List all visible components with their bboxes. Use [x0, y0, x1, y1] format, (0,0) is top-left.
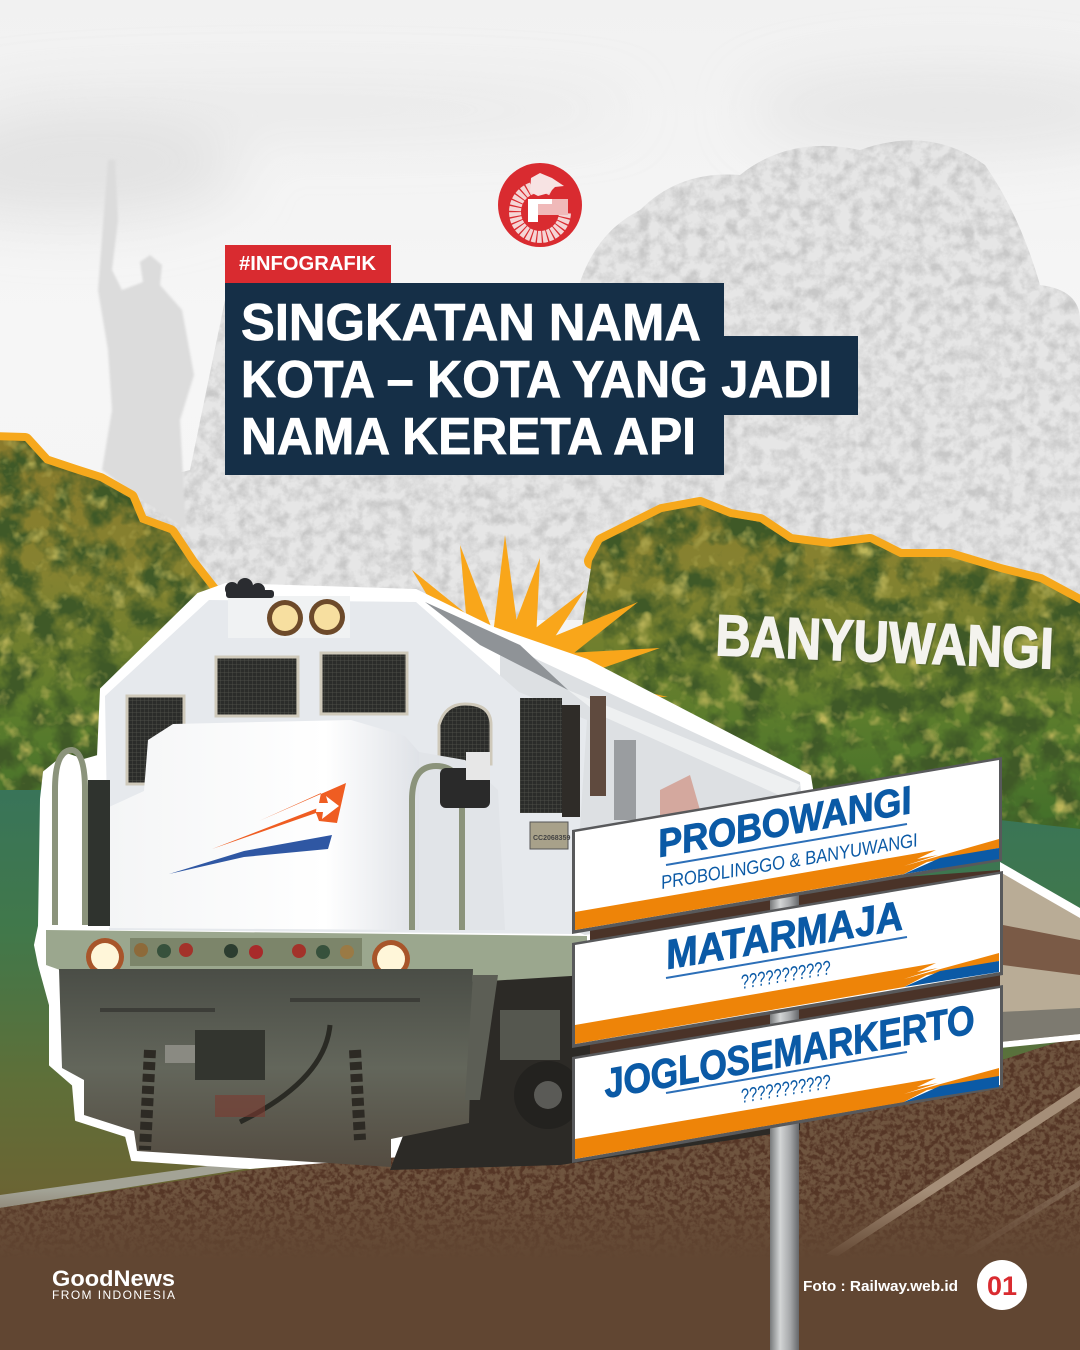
- title block: KOTA – KOTA YANG JADI: [241, 351, 832, 409]
- brand: GoodNews From Indonesia: [52, 1266, 175, 1302]
- hand rails: [55, 750, 462, 930]
- page number: [977, 1260, 1027, 1310]
- orange band: [575, 953, 999, 1044]
- background: grey clouds: [0, 70, 1080, 220]
- cab body: [105, 600, 587, 934]
- horn: [225, 578, 274, 598]
- nose white hood: [109, 720, 419, 930]
- blue band: [904, 1076, 999, 1102]
- sign title: MATARMAJA: [662, 892, 906, 978]
- bogie wheels: [465, 975, 582, 1129]
- KAI logo: orange swoosh: [169, 783, 346, 874]
- photo credit: Foto : Railway.web.id: [803, 1278, 958, 1295]
- subtitle: ???????????: [739, 1071, 833, 1108]
- background: grey statue: [98, 160, 194, 530]
- train white cut-out outline: [35, 584, 830, 1168]
- underside reds: [590, 870, 1000, 1100]
- driver: [466, 752, 490, 780]
- title block: SINGKATAN NAMA: [241, 294, 701, 352]
- green lamp panel: [130, 938, 362, 966]
- nose side panel: [419, 752, 505, 930]
- orange band: [575, 839, 999, 930]
- sign pole: [770, 895, 799, 1350]
- sign title: JOGLOSEMARKERTO: [600, 996, 978, 1107]
- long hood roof: [425, 602, 568, 690]
- side step dark door: [88, 780, 110, 926]
- blue band: [904, 848, 999, 874]
- tag: #INFOGRAFIK: #INFOGRAFIK: [239, 253, 377, 275]
- locomotive: [35, 578, 1000, 1170]
- sun burst: [412, 535, 668, 697]
- twin headlights: [267, 599, 345, 636]
- sign: JOGLOSEMARKERTO: [572, 985, 1003, 1163]
- subtitle: PROBOLINGGO & BANYUWANGI: [659, 830, 920, 894]
- sign: PROBOWANGI: [572, 757, 1002, 934]
- title block: [225, 283, 858, 475]
- side mirror: [440, 768, 490, 808]
- lower pilot: [59, 969, 473, 1167]
- front lamps: [86, 938, 410, 978]
- hood side upper light band: [568, 690, 800, 800]
- undercarriage: [390, 920, 800, 1170]
- page number: 01: [987, 1271, 1017, 1301]
- blue band: [904, 961, 999, 987]
- logo: GNFI garuda: [498, 163, 582, 247]
- front windows: [127, 653, 491, 784]
- brand: GoodNews From Indonesia: FROM INDONESIA: [52, 1288, 175, 1302]
- hills with orange outline: [0, 430, 1080, 840]
- underline: [666, 937, 907, 978]
- rail pipes: [100, 1000, 420, 1010]
- hood side stripe: [660, 775, 700, 815]
- title block: NAMA KERETA API: [241, 408, 696, 466]
- underline: [666, 1052, 907, 1093]
- brand: GoodNews From Indonesia: GoodNews: [52, 1266, 175, 1291]
- tag: #INFOGRAFIK: [225, 245, 391, 283]
- sign title: PROBOWANGI: [654, 779, 916, 866]
- background: grey trees: [138, 140, 1080, 620]
- subtitle: ???????????: [739, 957, 833, 994]
- green bumper frame: [46, 930, 587, 982]
- water: [0, 780, 1080, 1215]
- number plate: [530, 822, 570, 849]
- orange band: [575, 1068, 999, 1159]
- number plate: CC2068359: [533, 835, 570, 842]
- rear passenger carriage: [1000, 862, 1080, 1048]
- long hood side: [500, 642, 812, 935]
- ground and tracks: [0, 1030, 1080, 1350]
- underline: [666, 824, 907, 865]
- headlight housing: [228, 596, 350, 638]
- side vents: [520, 696, 636, 820]
- sign: MATARMAJA: [572, 871, 1003, 1048]
- coupler: [145, 1025, 360, 1150]
